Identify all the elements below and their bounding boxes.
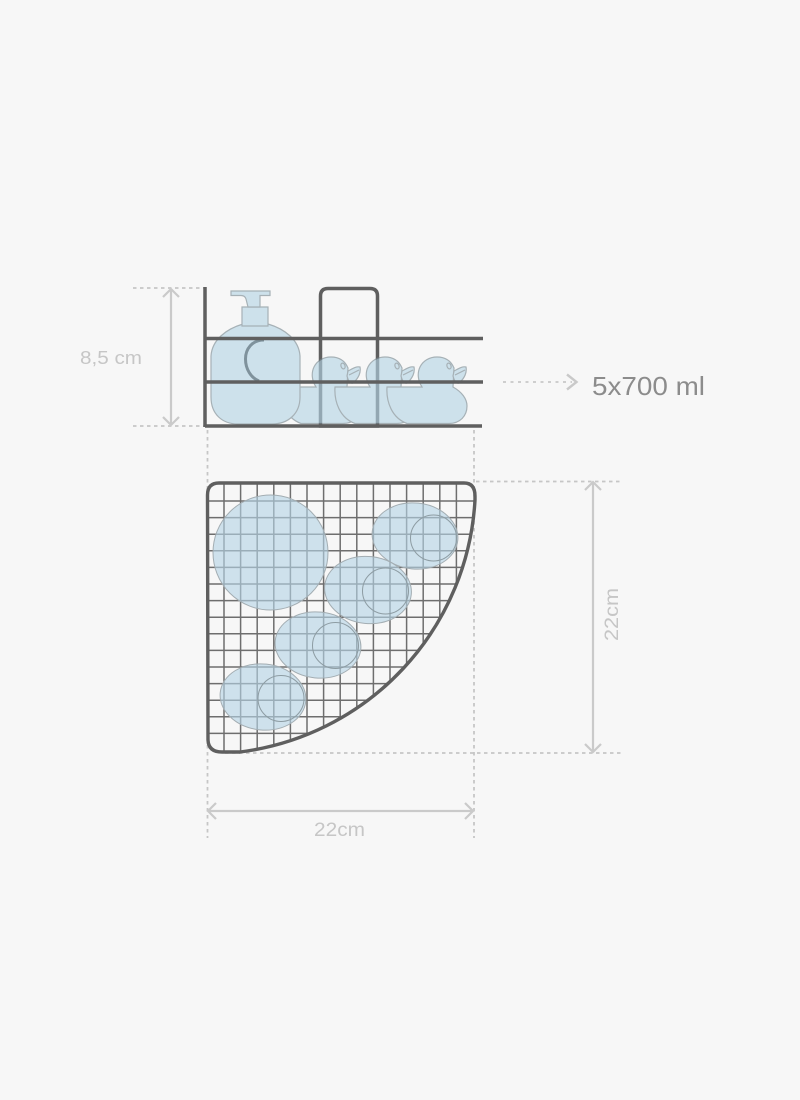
basket outline — [208, 483, 475, 752]
arrow: depth dimension — [585, 482, 601, 752]
duck from above 3 — [272, 608, 364, 682]
icon: rubber duck 3 — [387, 357, 467, 424]
side view: basket with bottle and ducks — [205, 287, 483, 427]
wire grid — [207, 483, 477, 755]
duck from above 4 — [217, 660, 309, 734]
icon: rubber duck 1 — [281, 357, 361, 424]
arrow: height dimension — [163, 289, 179, 425]
basket handle — [320, 288, 378, 426]
icon: rubber duck 2 — [335, 357, 415, 424]
label: capacity: 5x700 ml — [592, 371, 705, 401]
duck beaks and eyes — [340, 362, 466, 383]
items: ducks and bottle — [211, 291, 467, 424]
arrow: width dimension — [208, 803, 473, 819]
bottle from above — [213, 495, 328, 610]
arrow: capacity pointer — [503, 374, 576, 390]
label: depth: 22cm — [602, 588, 623, 641]
label: width: 22cm — [314, 820, 365, 841]
duck from above 1 — [369, 499, 461, 573]
duck from above 2 — [321, 552, 415, 628]
label: height: 8,5 cm — [80, 347, 142, 368]
basket frame and shelves — [205, 287, 483, 427]
top view: basket grid with items — [207, 483, 477, 755]
icon: soap bottle — [211, 291, 300, 424]
bottle label arc — [246, 340, 264, 381]
